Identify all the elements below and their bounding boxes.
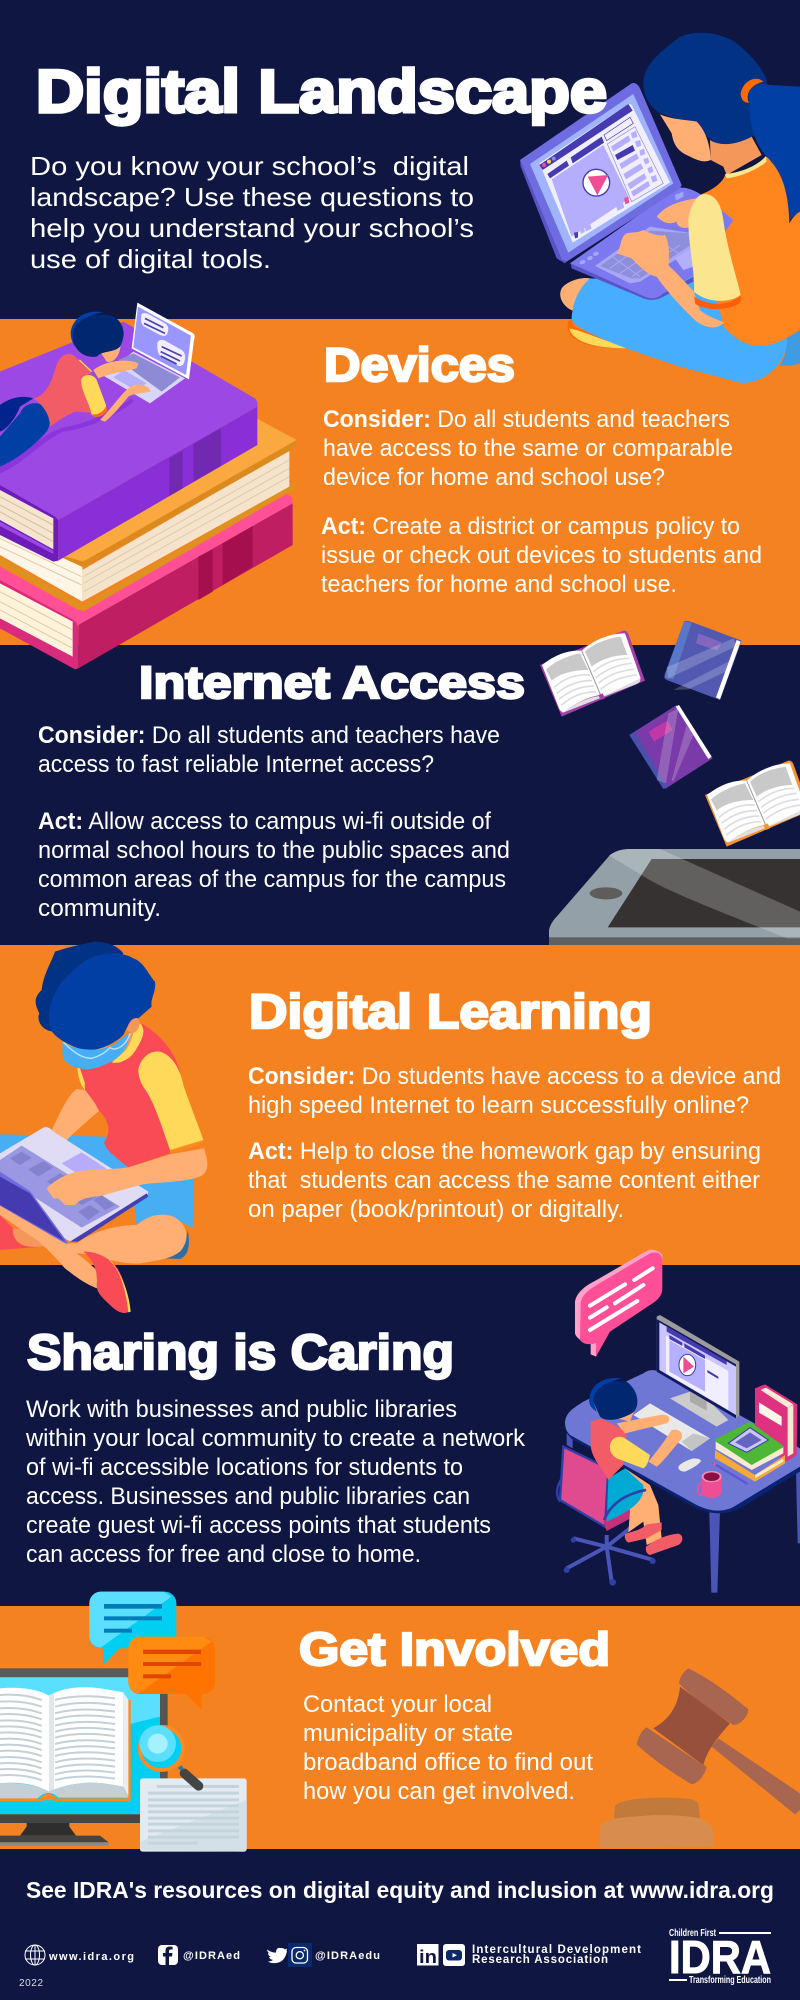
- text: devices consider and act: teachers for home and school use.: [321, 571, 677, 598]
- text: devices consider and act: Consider: Do all students and teachers: [323, 406, 730, 433]
- heading: get involved: Get Involved: [299, 1623, 610, 1675]
- text: internet access consider and act: [38, 722, 510, 922]
- text: sharing is caring: within your local community to create a network: [25, 1425, 526, 1452]
- heading: internet access: Internet Access: [139, 657, 525, 708]
- text: devices consider and act: Act: Create a district or campus policy to: [321, 513, 740, 540]
- closed book purple: [629, 705, 713, 789]
- illustration: gavel: [600, 1668, 800, 1848]
- text: internet access consider and act: normal school hours to the public spaces and: [38, 837, 510, 864]
- footer: website: www.idra.org: [48, 1951, 134, 1963]
- books and calculator: [713, 1384, 797, 1483]
- illustration: girl with laptop: [520, 33, 800, 383]
- illustration: student with mask and laptop: [0, 942, 207, 1313]
- closed book blue: [664, 621, 742, 700]
- panel: get involved background: [0, 1606, 800, 1849]
- text: sharing is caring: Work with businesses and public libraries: [26, 1396, 457, 1423]
- footer: twitter and instagram: [267, 1943, 380, 1967]
- open book orange: [705, 761, 800, 847]
- chat bubble blue: [89, 1592, 176, 1665]
- chat bubble orange: [128, 1637, 215, 1710]
- speech bubble: [575, 1250, 662, 1357]
- footer: linkedin and youtube: in: [419, 1947, 437, 1967]
- text: internet access consider and act: access to fast reliable Internet access?: [38, 751, 434, 778]
- pink book: [0, 494, 293, 669]
- footer: website: [25, 1945, 134, 1965]
- footer: organization name: Intercultural Development: [472, 1944, 641, 1956]
- text: sharing is caring: create guest wi-fi access points that students: [26, 1512, 491, 1539]
- panel: footer background: [0, 1849, 800, 2000]
- footer: linkedin and youtube: [417, 1944, 465, 1967]
- mug: [698, 1471, 722, 1498]
- text: get involved: [303, 1691, 593, 1805]
- illustration: flying books and tablet: [540, 621, 800, 945]
- panel: digital learning background: [0, 945, 800, 1265]
- footer: facebook: @IDRAed: [183, 1950, 240, 1962]
- illustration: monitor, open book and chat bubbles: [0, 1592, 247, 1852]
- text: digital learning consider and act: that students can access the same content either: [248, 1167, 760, 1194]
- text: internet access consider and act: common areas of the campus for the campus: [38, 866, 506, 893]
- intro text: landscape? Use these questions to: [30, 182, 474, 212]
- heading: digital learning: Digital Learning: [249, 986, 652, 1039]
- illustration: student on book stack: [0, 303, 297, 669]
- text: internet access consider and act: community.: [38, 895, 161, 922]
- heading: devices: Devices: [324, 338, 515, 391]
- footer: organization name: Research Association: [472, 1954, 608, 1966]
- text: get involved: broadband office to find out: [303, 1749, 593, 1776]
- text: digital learning consider and act: on paper (book/printout) or digitally.: [248, 1196, 624, 1223]
- person: [589, 1378, 682, 1555]
- person and laptop: [0, 303, 195, 467]
- orange book: [0, 418, 297, 612]
- open book: [0, 1687, 131, 1802]
- keyboard and mouse: [633, 1403, 710, 1472]
- panel: header background: [0, 0, 800, 319]
- panel: devices background: [0, 319, 800, 645]
- intro text: help you understand your school’s: [30, 213, 474, 243]
- text: get involved: Contact your local: [303, 1691, 492, 1718]
- magnifying glass: [139, 1725, 199, 1786]
- purple book: [0, 322, 258, 562]
- text: sharing is caring: can access for free and close to home.: [26, 1541, 421, 1568]
- desk: [565, 1370, 800, 1593]
- resources call to action: See IDRA's resources on digital equity and inclusion at www.idra.org: [26, 1877, 774, 1903]
- document: [140, 1778, 247, 1852]
- tablet: [549, 849, 800, 945]
- text: digital learning consider and act: Act: Help to close the homework gap by ensuring: [248, 1138, 761, 1165]
- text: sharing is caring: of wi-fi accessible locations for students to: [26, 1454, 463, 1481]
- panel: internet access background: [0, 645, 800, 945]
- footer: year: 2022: [19, 1978, 43, 1989]
- text: digital learning consider and act: high speed Internet to learn successfully online?: [248, 1092, 749, 1119]
- text: devices consider and act: have access to the same or comparable: [323, 435, 733, 462]
- text: sharing is caring: [25, 1396, 526, 1568]
- text: devices consider and act: issue or check out devices to students and: [321, 542, 762, 569]
- panel: sharing is caring background: [0, 1265, 800, 1606]
- text: devices consider and act: [321, 406, 762, 598]
- footer: twitter and instagram: @IDRAedu: [315, 1950, 380, 1962]
- text: sharing is caring: access. Businesses and public libraries can: [26, 1483, 470, 1510]
- illustration: student at desk with speech bubble: [557, 1250, 800, 1593]
- heading: sharing is caring: Sharing is Caring: [27, 1326, 454, 1380]
- text: digital learning consider and act: [248, 1063, 781, 1223]
- monitor: [657, 1315, 739, 1427]
- text: get involved: how you can get involved.: [303, 1778, 575, 1805]
- monitor: [0, 1668, 168, 1846]
- footer: organization name: [472, 1944, 641, 1966]
- intro text: Do you know your school’s digital: [30, 151, 469, 181]
- footer: IDRA logo: Children First: [669, 1928, 716, 1939]
- footer: IDRA logo: IDRA: [669, 1931, 771, 1983]
- text: internet access consider and act: Act: Allow access to campus wi-fi outside of: [38, 808, 491, 835]
- text: devices consider and act: device for home and school use?: [323, 464, 665, 491]
- intro text: [30, 151, 474, 274]
- intro text: use of digital tools.: [30, 244, 271, 274]
- chair: [557, 1447, 656, 1586]
- text: internet access consider and act: Consider: Do all students and teachers have: [38, 722, 500, 749]
- footer: facebook: [158, 1945, 240, 1965]
- text: get involved: municipality or state: [303, 1720, 513, 1747]
- text: digital learning consider and act: Consider: Do students have access to a device and: [248, 1063, 781, 1090]
- open book purple: [540, 631, 645, 717]
- title: Digital Landscape: [36, 58, 607, 125]
